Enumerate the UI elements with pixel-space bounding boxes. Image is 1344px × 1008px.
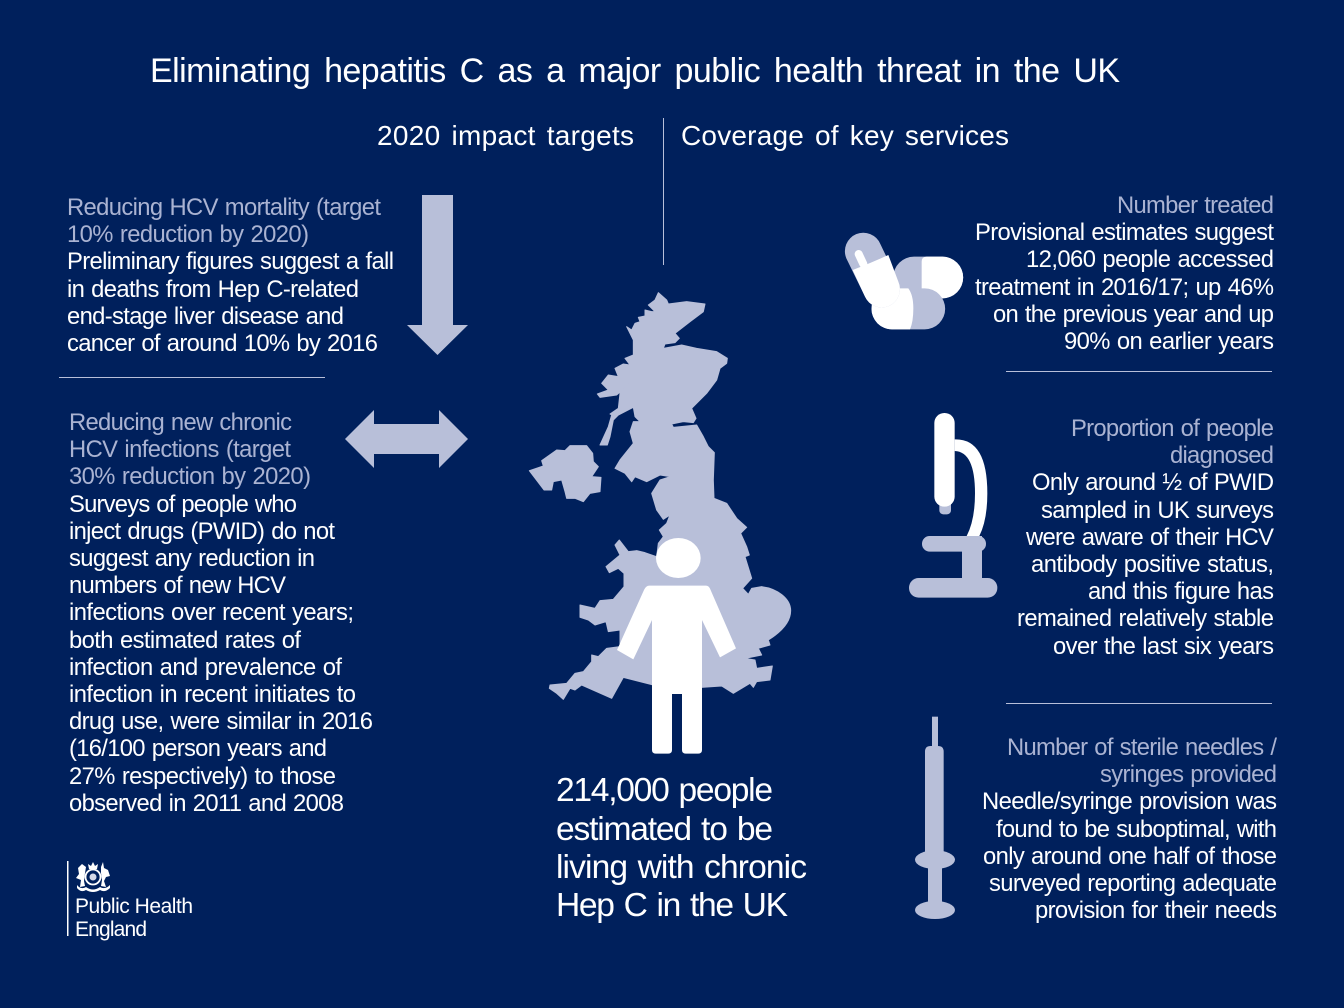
map: United Kingdom [529, 293, 791, 699]
needles body text [982, 788, 1277, 924]
Great Britain [549, 293, 791, 699]
infections body text: observed in 2011 and 2008 [69, 790, 344, 817]
diagnosed body text: were aware of their HCV [1025, 524, 1274, 551]
infections heading: Reducing new chronic [69, 409, 292, 436]
mortality body text: Preliminary figures suggest a fall [67, 248, 394, 275]
logo: Public Health England: England [75, 918, 147, 941]
panel: number of sterile needles [982, 734, 1277, 924]
infections body text: infection and prevalence of [69, 654, 342, 681]
arrow: downward [407, 195, 468, 355]
needles heading: syringes provided [1100, 761, 1277, 788]
logo: Public Health England [67, 861, 193, 941]
diagnosed body text: and this figure has [1088, 578, 1274, 605]
icon: person [617, 538, 736, 754]
callout: people living with chronic Hep C: estimated to be [556, 811, 773, 848]
infections heading: HCV infections (target [69, 436, 291, 463]
treated body text: 90% on earlier years [1064, 328, 1274, 355]
infections heading [69, 409, 311, 490]
title: Eliminating hepatitis C as a major public health threat in the UK [150, 52, 1120, 90]
treated body text: treatment in 2016/17; up 46% [975, 274, 1274, 301]
infections body text: 27% respectively) to those [69, 763, 336, 790]
infections body text: inject drugs (PWID) do not [69, 518, 335, 545]
callout: people living with chronic Hep C: Hep C in the UK [556, 887, 789, 924]
needles body text: found to be suboptimal, with [996, 816, 1277, 843]
infections body text: numbers of new HCV [69, 572, 286, 599]
treated body text: on the previous year and up [993, 301, 1274, 328]
panel: proportion of people diagnosed [1017, 415, 1274, 660]
callout: people living with chronic Hep C: 214,000 people [556, 772, 773, 809]
heading: 2020 impact targets: 2020 impact targets [377, 120, 634, 151]
diagnosed heading [1071, 415, 1274, 469]
needles heading: Number of sterile needles / [1007, 734, 1277, 761]
diagnosed body text: sampled in UK surveys [1041, 497, 1274, 524]
needles body text: only around one half of those [983, 843, 1277, 870]
mortality heading: 10% reduction by 2020) [67, 221, 309, 248]
infections body text [69, 491, 373, 817]
infections body text: Surveys of people who [69, 491, 297, 518]
mortality body text: in deaths from Hep C-related [67, 276, 359, 303]
needles heading [1007, 734, 1277, 788]
infections body text: both estimated rates of [69, 627, 301, 654]
icon: microscope [909, 413, 997, 598]
heading: coverage of key services: Coverage of key services [681, 120, 1009, 151]
icon: pills [845, 233, 963, 329]
mortality heading: Reducing HCV mortality (target [67, 194, 381, 221]
mortality heading [67, 194, 381, 248]
mortality body text [67, 248, 394, 357]
panel: number treated [975, 192, 1274, 355]
icon: syringe [915, 717, 955, 919]
needles body text: surveyed reporting adequate [989, 870, 1277, 897]
needles body text: Needle/syringe provision was [982, 788, 1277, 815]
panel: reducing HCV mortality [67, 194, 394, 357]
panel: reducing new chronic infections [69, 409, 373, 817]
infections body text: (16/100 person years and [69, 735, 327, 762]
Northern Ireland [529, 446, 601, 502]
infections body text: suggest any reduction in [69, 545, 315, 572]
infections heading: 30% reduction by 2020) [69, 463, 311, 490]
diagnosed heading: Proportion of people [1071, 415, 1274, 442]
diagnosed heading: diagnosed [1170, 442, 1274, 469]
callout: people living with chronic Hep C [556, 772, 807, 924]
logo: Public Health England: Public Health [75, 895, 193, 918]
callout: people living with chronic Hep C: living with chronic [556, 849, 807, 886]
diagnosed body text: Only around ½ of PWID [1032, 469, 1274, 496]
infections body text: infections over recent years; [69, 599, 354, 626]
diagnosed body text [1017, 469, 1274, 660]
treated body text: 12,060 people accessed [1026, 246, 1274, 273]
diagnosed body text: antibody positive status, [1031, 551, 1274, 578]
treated body text [975, 219, 1274, 355]
arrow: two-way horizontal [345, 410, 468, 468]
needles body text: provision for their needs [1035, 897, 1277, 924]
mortality body text: cancer of around 10% by 2016 [67, 330, 378, 357]
mortality body text: end-stage liver disease and [67, 303, 344, 330]
diagnosed body text: over the last six years [1053, 633, 1274, 660]
infections body text: drug use, were similar in 2016 [69, 708, 373, 735]
treated body text: Provisional estimates suggest [975, 219, 1274, 246]
infections body text: infection in recent initiates to [69, 681, 356, 708]
diagnosed body text: remained relatively stable [1017, 605, 1274, 632]
icon: royal crest [76, 862, 110, 892]
treated heading: Number treated [1117, 192, 1274, 219]
